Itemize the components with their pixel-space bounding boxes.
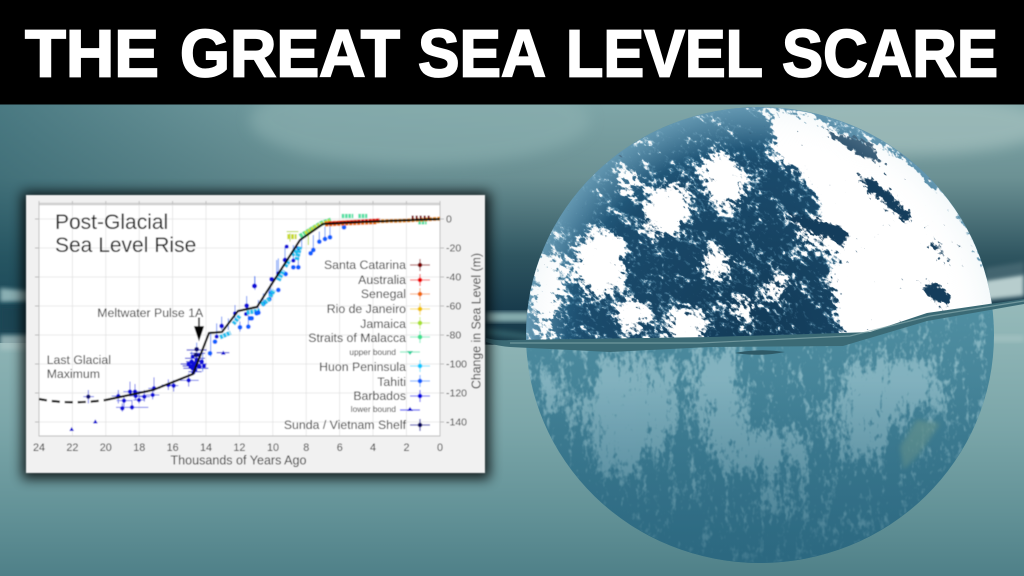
title [25, 16, 998, 92]
x axis tick labels: 20 [100, 442, 112, 454]
x axis tick labels: 24 [33, 442, 45, 454]
legend: upper bound: upper bound [349, 347, 396, 357]
x axis tick labels: 0 [437, 442, 443, 454]
globe half-submerged in water [526, 107, 996, 563]
legend: Jamaica [360, 317, 430, 331]
legend: upper bound [349, 347, 420, 357]
annotation: Last Glacial Maximum [47, 353, 111, 381]
legend: Tahiti [377, 375, 430, 389]
x axis tick labels: 6 [337, 442, 343, 454]
y axis tick labels: -20 [446, 242, 461, 254]
y axis tick labels: 0 [446, 214, 452, 226]
annotation: Last Glacial Maximum: Maximum [47, 367, 100, 381]
sea level curve [39, 219, 440, 402]
y axis tick labels: -60 [446, 300, 461, 312]
title: SCARE [782, 16, 998, 92]
y axis tick labels: -140 [446, 416, 467, 428]
water surface line [486, 299, 1024, 355]
x axis tick labels: 18 [133, 442, 145, 454]
title: GREAT [180, 16, 400, 92]
y axis tick labels [446, 214, 467, 428]
scatter data left part [69, 277, 261, 431]
legend: Rio de Janeiro: Rio de Janeiro [327, 302, 406, 316]
legend [284, 258, 430, 432]
legend: Barbados: Barbados [353, 389, 406, 403]
chart title: Post-Glacial [55, 211, 168, 234]
y axis tick labels: -80 [446, 330, 461, 342]
x axis tick labels: 14 [200, 442, 212, 454]
chart title: Sea Level Rise [55, 234, 196, 257]
x axis tick labels: 16 [167, 442, 179, 454]
legend: Tahiti: Tahiti [377, 375, 406, 389]
x axis tick labels [33, 442, 443, 454]
annotation: Meltwater Pulse 1A: Meltwater Pulse 1A [97, 306, 204, 320]
submerged lower hemisphere [526, 310, 994, 563]
legend: lower bound: lower bound [351, 404, 396, 414]
x axis tick labels: 2 [403, 442, 410, 454]
legend: Jamaica: Jamaica [360, 317, 406, 331]
legend: Santa Catarina: Santa Catarina [324, 258, 406, 272]
annotation: Last Glacial Maximum: Last Glacial [47, 353, 111, 367]
legend: Australia: Australia [358, 273, 406, 287]
chart panel shadow [22, 192, 490, 479]
legend: Straits of Malacca: Straits of Malacca [308, 331, 406, 345]
y axis tick labels: -40 [446, 272, 461, 284]
annotation arrow [195, 318, 203, 339]
legend: Barbados [353, 389, 430, 403]
exposed upper hemisphere with clouds [526, 107, 996, 355]
y axis tick labels: -100 [446, 358, 467, 370]
x axis tick labels: 22 [66, 442, 78, 454]
x axis tick labels: 4 [370, 442, 376, 454]
chart title [55, 211, 196, 257]
y axis title: Change in Sea Level (m) [468, 253, 484, 389]
scatter data right part [248, 216, 440, 321]
legend: Australia [358, 273, 430, 287]
title bar [0, 0, 1024, 104]
x axis title: Thousands of Years Ago [170, 452, 306, 468]
x axis tick labels: 8 [303, 442, 309, 454]
legend: Sunda / Vietnam Shelf: Sunda / Vietnam Shelf [284, 418, 407, 432]
title: SEA [418, 16, 546, 92]
legend: Senegal: Senegal [361, 287, 406, 301]
chart panel: post-glacial sea level rise [26, 195, 485, 473]
legend: Huon Peninsula: Huon Peninsula [319, 360, 406, 374]
legend: Senegal [361, 287, 430, 301]
x axis tick labels: 10 [267, 442, 279, 454]
title: LEVEL [566, 16, 763, 92]
legend: lower bound [351, 404, 420, 414]
x axis tick labels: 12 [233, 442, 245, 454]
title: THE [25, 16, 159, 92]
y axis tick labels: -120 [446, 388, 467, 400]
